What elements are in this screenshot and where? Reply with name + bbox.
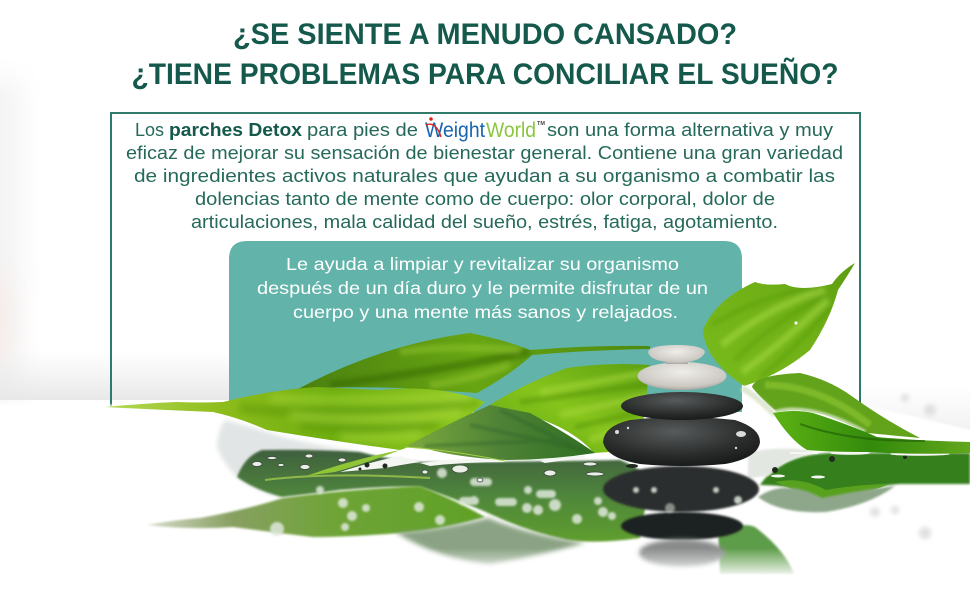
- icon: stone stack: [603, 345, 760, 466]
- intro text block: eficaz de mejorar su sensación de bienestar general. Contiene una gran variedad: [126, 143, 843, 163]
- leaf: upper left back leaf: [298, 333, 650, 393]
- reflection: ringed droplets: [252, 454, 604, 482]
- callout text: después de un día duro y le permite disfrutar de un: [257, 278, 708, 298]
- WeightWorld logo: TM: [537, 121, 545, 127]
- panel: text frame: [111, 113, 860, 412]
- callout text: [257, 254, 708, 322]
- stone: third dark: [621, 392, 743, 420]
- reflection: lower right leaf: [718, 525, 794, 574]
- stone: second light: [638, 362, 726, 390]
- intro text block: [126, 120, 843, 232]
- intro text block: articulaciones, mala calidad del sueño, estrés, fatiga, agotamiento.: [191, 212, 778, 232]
- callout text: cuerpo y una mente más sanos y relajados.: [293, 302, 678, 322]
- reflection: bubbly water patch: [217, 420, 360, 497]
- intro text block: de ingredientes activos naturales que ayudan a su organismo a combatir las: [134, 166, 835, 186]
- WeightWorld logo: [425, 117, 545, 142]
- leaf: lower right leaf: [742, 373, 970, 454]
- stone: top light: [648, 345, 705, 364]
- intro text block: para pies de: [307, 120, 418, 140]
- leaf: top right leaf: [703, 263, 855, 386]
- reflection: stones: [603, 466, 759, 512]
- reflection: glare patch: [340, 456, 420, 472]
- leaf: right mid leaf: [485, 364, 650, 453]
- reflection: right leaf: [760, 453, 970, 497]
- title: ¿TIENE PROBLEMAS PARA CONCILIAR EL SUEÑO?: [132, 57, 838, 91]
- callout text: Le ayuda a limpiar y revitalizar su organismo: [286, 254, 679, 274]
- panel: teal callout: [229, 241, 742, 412]
- stone: bottom dark: [603, 417, 760, 466]
- title: ¿SE SIENTE A MENUDO CANSADO?: [233, 18, 737, 51]
- grey mist right: [870, 394, 936, 539]
- reflection: white glare right: [771, 451, 950, 478]
- WeightWorld logo: World: [486, 119, 536, 142]
- white water surface fog: [0, 404, 970, 600]
- intro text block: parches Detox: [169, 120, 302, 140]
- intro text block: dolencias tanto de mente como de cuerpo: olor corporal, dolor de: [195, 189, 775, 209]
- bottom fade: [100, 548, 820, 578]
- reflection: left leaf: [147, 486, 485, 537]
- title: [132, 18, 838, 91]
- reflection: bokeh droplets: [270, 468, 742, 536]
- stone highlights: [615, 427, 746, 449]
- leaf: front left leaf: [105, 387, 485, 450]
- reflection: thin leaf tip: [306, 450, 400, 476]
- WeightWorld logo: Weight: [425, 119, 485, 142]
- reflection: lower leaf: [395, 518, 585, 564]
- leaf: dark folded leaf: [405, 405, 595, 461]
- reflection: dark droplets: [358, 455, 907, 473]
- water reflection: [100, 394, 970, 578]
- intro text block: Los: [135, 120, 164, 140]
- intro text block: son una forma alternativa y muy: [547, 120, 833, 140]
- reflection: green water: [237, 450, 650, 542]
